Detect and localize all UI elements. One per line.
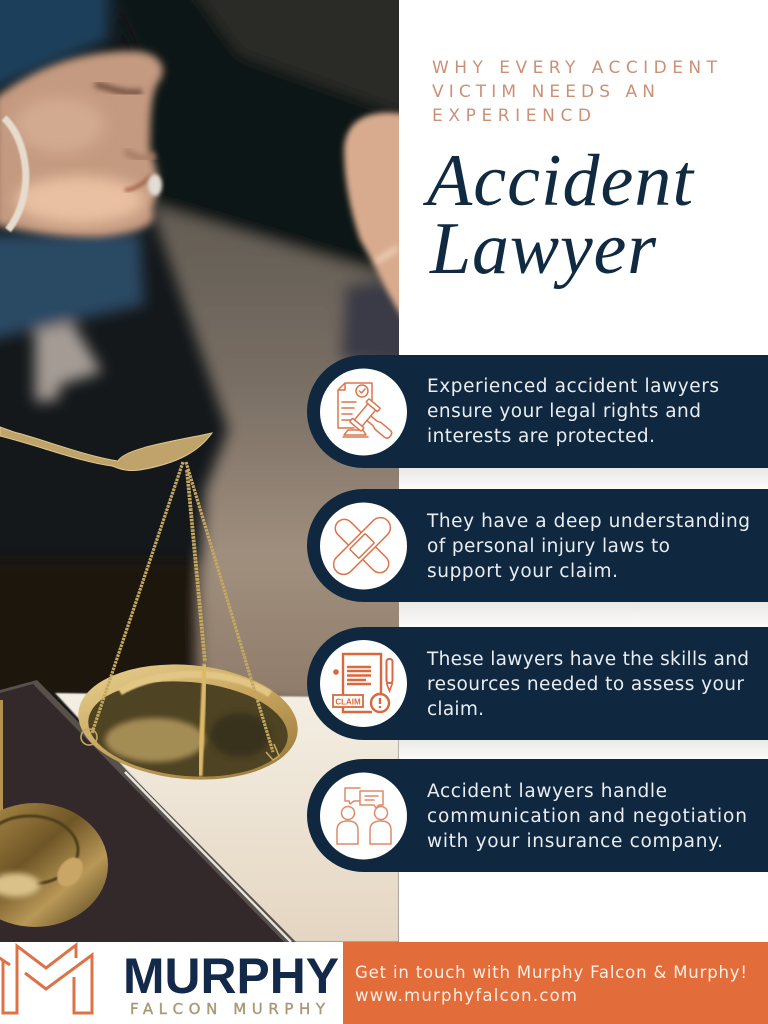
brass base [0,700,108,927]
scale pan [78,663,298,780]
footer: logo area [0,942,343,1024]
icon: crossed bandages [329,513,395,579]
text: legal rights: Experienced accident lawyers [427,376,719,397]
icon: document and gavel [338,383,400,448]
text: communication: communication and negotiation [427,806,747,827]
panel: skills and resources [307,627,768,740]
eyebrow heading: WHY EVERY ACCIDENT [432,58,718,78]
text: skills and resources: These lawyers have the skills and [426,649,749,670]
text: skills and resources: claim. [427,699,484,720]
text: skills and resources [426,649,749,720]
eyebrow heading [432,58,718,126]
title: Accident [422,140,695,222]
icon: two people talking [337,788,391,844]
gap shading [399,468,768,489]
panel: communication [307,759,768,872]
wordmark: MURPHY [123,948,339,1004]
text: skills and resources: resources needed to assess your [427,674,744,695]
photo: scales of justice and lawyer [0,0,420,942]
table surface [55,693,399,942]
scale chains [81,462,279,760]
title [422,140,695,290]
panel: injury laws [307,489,768,602]
icon: MFM monogram [0,945,92,1013]
text: legal rights: interests are protected. [427,426,655,447]
title: Lawyer [429,208,657,290]
scale arm [0,427,212,471]
icon: claim form: CLAIM [335,698,361,706]
right hand [344,113,405,322]
icon: claim form [333,654,392,712]
left hand [0,51,163,237]
text: legal rights [427,376,719,447]
text: injury laws: support your claim. [427,561,618,582]
text: injury laws: They have a deep understanding [426,511,750,532]
text: injury laws [426,511,750,582]
footer: contact bar [343,942,768,1024]
text: communication: Accident lawyers handle [427,781,667,802]
footer: contact bar: www.murphyfalcon.com [355,986,577,1005]
text: communication: with your insurance company. [427,831,723,852]
text: communication [427,781,747,852]
white panel [399,0,768,942]
footer: contact bar: Get in touch with Murphy Falcon & Murphy! [355,963,747,982]
panel: legal rights [307,355,768,468]
text: legal rights: ensure your legal rights and [427,401,701,422]
wordmark: FALCON MURPHY [130,1000,326,1018]
text: injury laws: of personal injury laws to [427,536,670,557]
eyebrow heading: EXPERIENCD [432,106,591,126]
book [0,680,296,942]
eyebrow heading: VICTIM NEEDS AN [432,82,655,102]
